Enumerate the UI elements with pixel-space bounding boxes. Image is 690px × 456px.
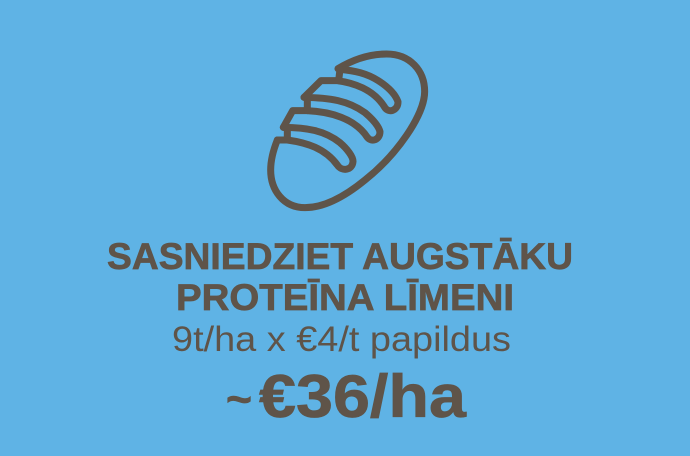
heading line 2: PROTEĪNA LĪMENI xyxy=(176,277,514,318)
result value: €36/ha xyxy=(259,363,467,430)
result value: ~ xyxy=(226,375,252,424)
icon: bread loaf xyxy=(271,54,425,208)
heading line 1: SASNIEDZIET AUGSTĀKU xyxy=(107,236,573,277)
calculation text: 9t/ha x €4/t papildus xyxy=(172,320,511,359)
